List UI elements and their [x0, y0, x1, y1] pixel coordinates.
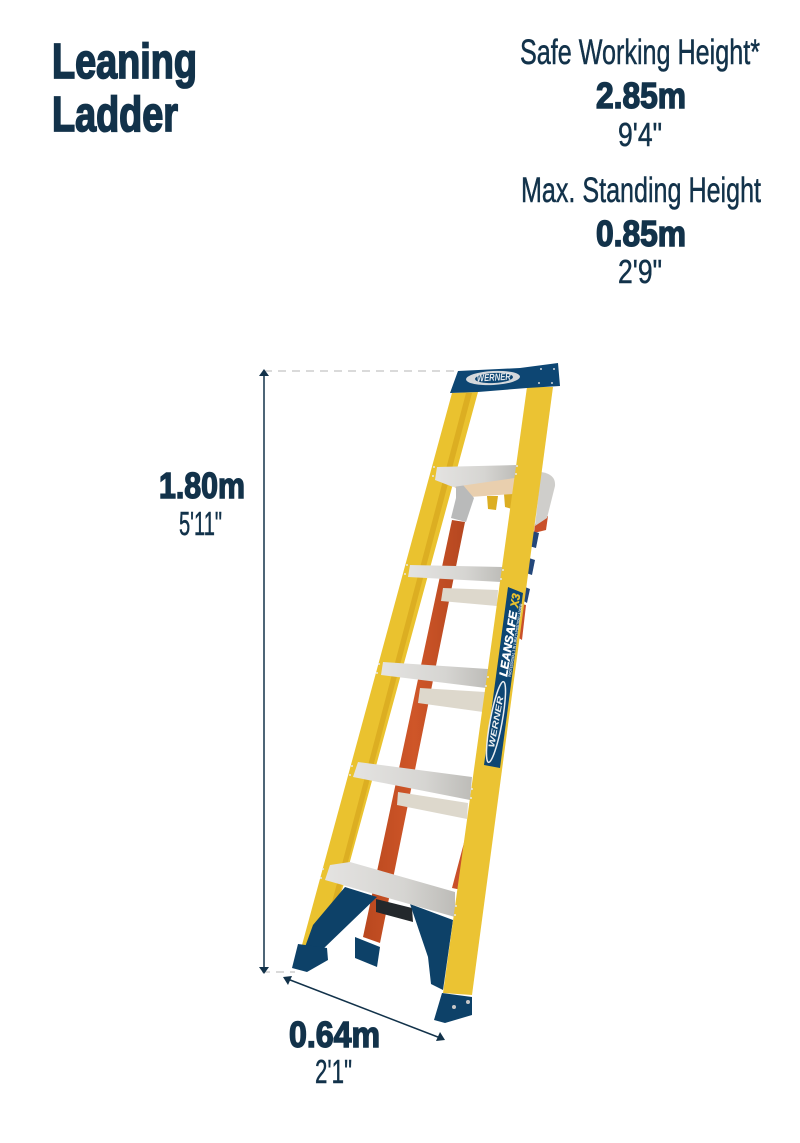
safe working height spec — [520, 33, 760, 153]
center foot — [355, 937, 380, 967]
step 1 underside — [453, 477, 516, 497]
ladder illustration — [292, 363, 560, 1023]
top cap: WERNER — [477, 372, 512, 384]
max standing height spec — [521, 171, 761, 290]
right foot — [434, 993, 472, 1023]
rail sticker: LEANSAFE — [498, 610, 520, 677]
rail sticker: WERNER — [486, 694, 506, 748]
steps — [325, 465, 517, 917]
width label — [289, 1014, 380, 1090]
left foot — [292, 944, 328, 972]
height dimension arrow — [259, 369, 458, 974]
width label: 2'1" — [315, 1053, 352, 1090]
rear right orange pole — [452, 820, 476, 890]
height label: 5'11" — [179, 505, 222, 542]
title — [52, 35, 197, 142]
width label: 0.64m — [289, 1014, 380, 1055]
front right rail — [443, 387, 553, 995]
height label — [159, 465, 245, 542]
max standing height spec: 2'9" — [618, 253, 662, 290]
rear orange pole — [363, 520, 465, 943]
height label: 1.80m — [159, 465, 245, 506]
top cap — [450, 363, 560, 393]
safe working height spec: 9'4" — [618, 116, 662, 153]
rear hinge plate — [535, 472, 555, 526]
yellow hooks — [487, 494, 514, 510]
width dimension arrow — [283, 976, 445, 1041]
rung braces — [397, 588, 498, 819]
blue rear brace right — [410, 904, 453, 990]
max standing height spec: 0.85m — [596, 213, 686, 254]
rail sticker — [483, 587, 524, 768]
bolts — [320, 465, 518, 916]
aluminium hinge bracket — [451, 485, 474, 522]
left rail ridge — [326, 393, 472, 925]
safe working height spec: 2.85m — [596, 75, 686, 116]
rail sticker: PROFESSIONAL 3 IN 1 MULTI-POSITION LADDER — [507, 603, 524, 677]
rail sticker: X3 — [509, 592, 523, 609]
title: Ladder — [52, 88, 178, 142]
center plate — [376, 899, 413, 922]
rear bracket stripes — [519, 516, 548, 640]
left rail — [302, 392, 478, 945]
title: Leaning — [52, 35, 197, 89]
blue rear brace left — [305, 887, 377, 950]
